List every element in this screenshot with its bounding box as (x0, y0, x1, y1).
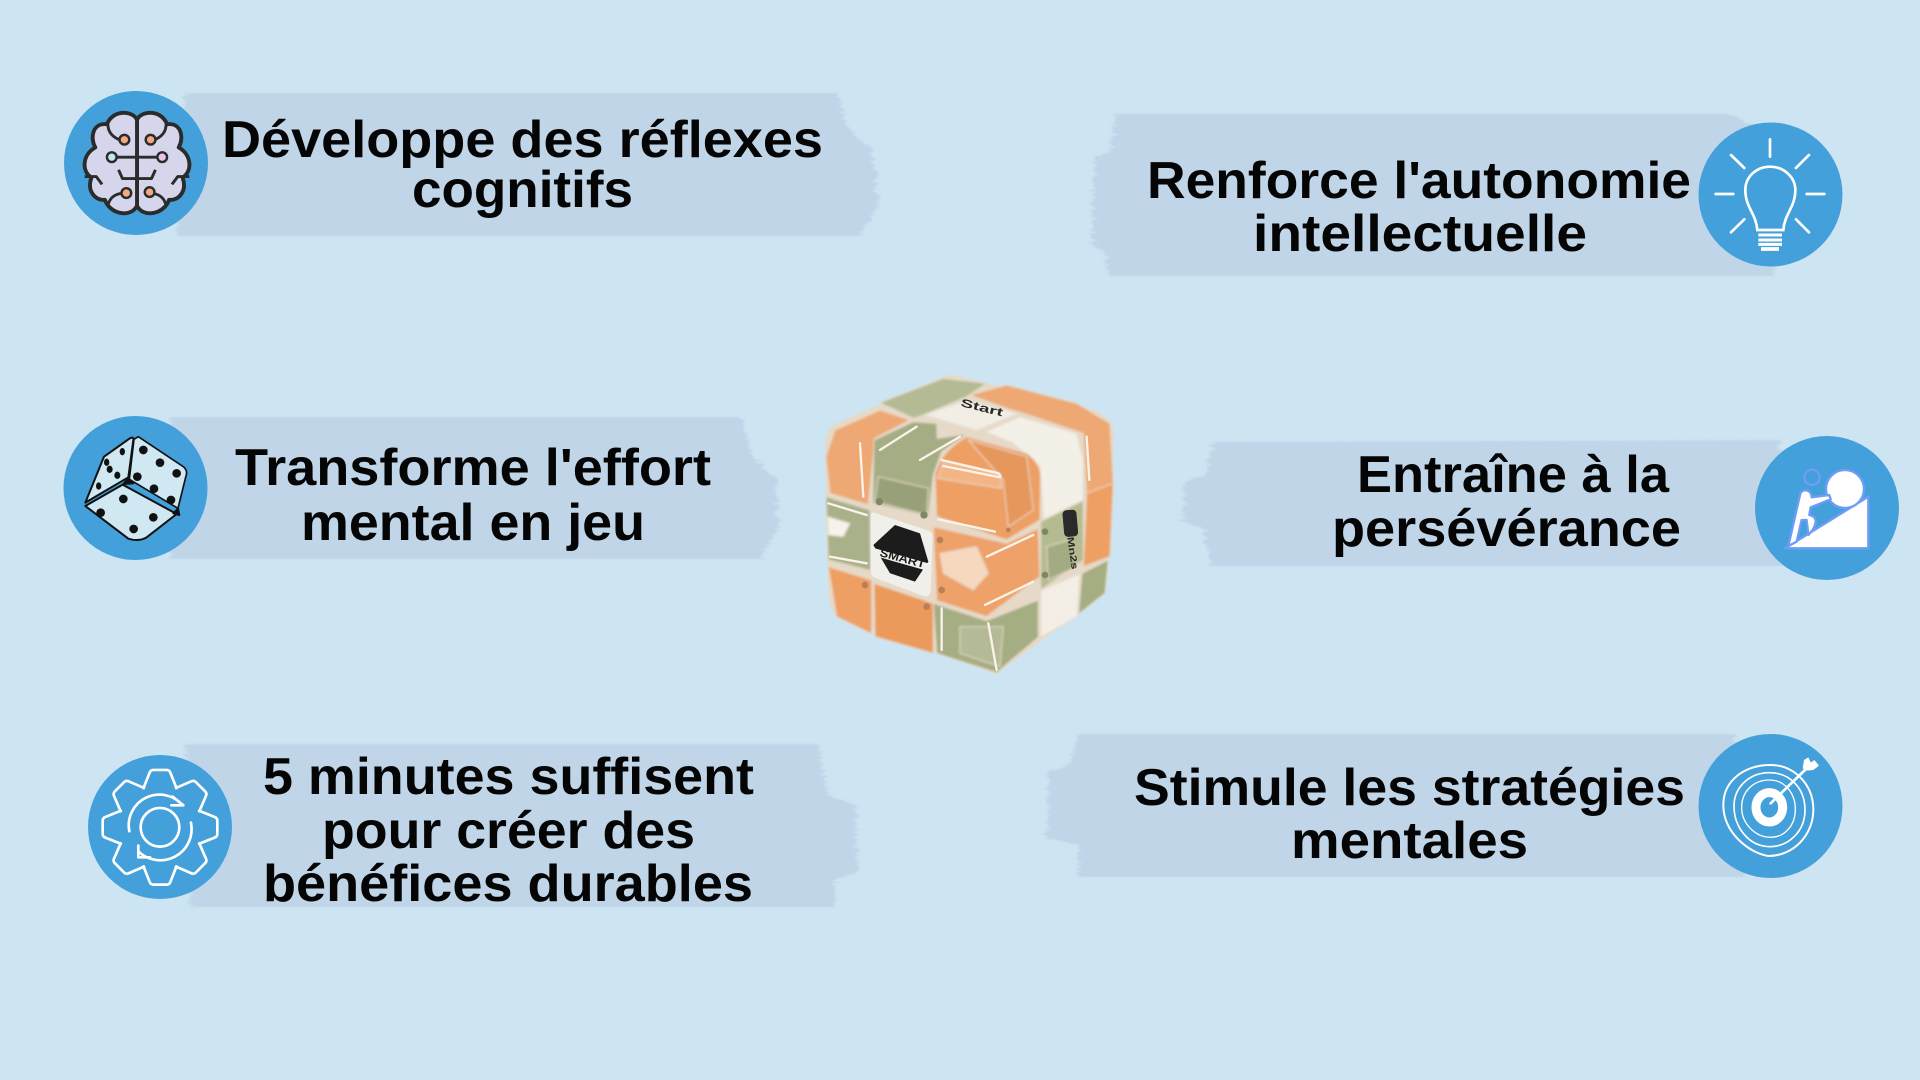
brush band (177, 93, 878, 236)
text: Entraîne à la (1357, 446, 1670, 504)
icon circle: target (1698, 734, 1842, 878)
text: persévérance (1332, 500, 1681, 558)
text: Développe des réflexes (222, 111, 823, 169)
SMART logo tile (871, 512, 933, 597)
brush band (1092, 114, 1775, 276)
text: Renforce l'autonomie (1147, 152, 1691, 210)
text: cognitifs (412, 161, 633, 219)
panel: mental strategies (1047, 734, 1842, 878)
icon circle: dice (64, 416, 208, 560)
brush band (1183, 440, 1790, 566)
text: Stimule les stratégies (1134, 759, 1685, 817)
brush band (185, 744, 858, 907)
text: mental en jeu (301, 494, 645, 552)
cube pieces (826, 378, 1113, 673)
text: intellectuelle (1253, 205, 1587, 263)
slots and studs (828, 427, 1089, 670)
panel: five minutes (88, 744, 858, 913)
text: 5 minutes suffisent (263, 748, 754, 806)
panel: mental effort as play (64, 416, 778, 560)
brush band (1047, 734, 1745, 877)
central image: puzzle cube (825, 374, 1114, 674)
panel: cognitive reflexes (64, 91, 878, 236)
Start tile label: Start (959, 397, 1005, 419)
cube body (825, 374, 1114, 674)
SMART logo tile: SMART (878, 547, 926, 571)
text: Transforme l'effort (235, 439, 711, 497)
panel: perseverance (1183, 436, 1899, 580)
icon circle: climber (1755, 436, 1899, 580)
icon circle: gear (88, 755, 232, 899)
brush band (170, 417, 778, 559)
icon circle: light bulb (1698, 122, 1842, 266)
text: mentales (1291, 812, 1528, 870)
panel: intellectual autonomy (1092, 114, 1842, 276)
icon circle: brain (64, 91, 208, 235)
text: pour créer des (322, 802, 695, 860)
text: bénéfices durables (263, 855, 753, 913)
side tile mark (1062, 509, 1080, 570)
side tile mark: Mn2s (1065, 536, 1080, 570)
